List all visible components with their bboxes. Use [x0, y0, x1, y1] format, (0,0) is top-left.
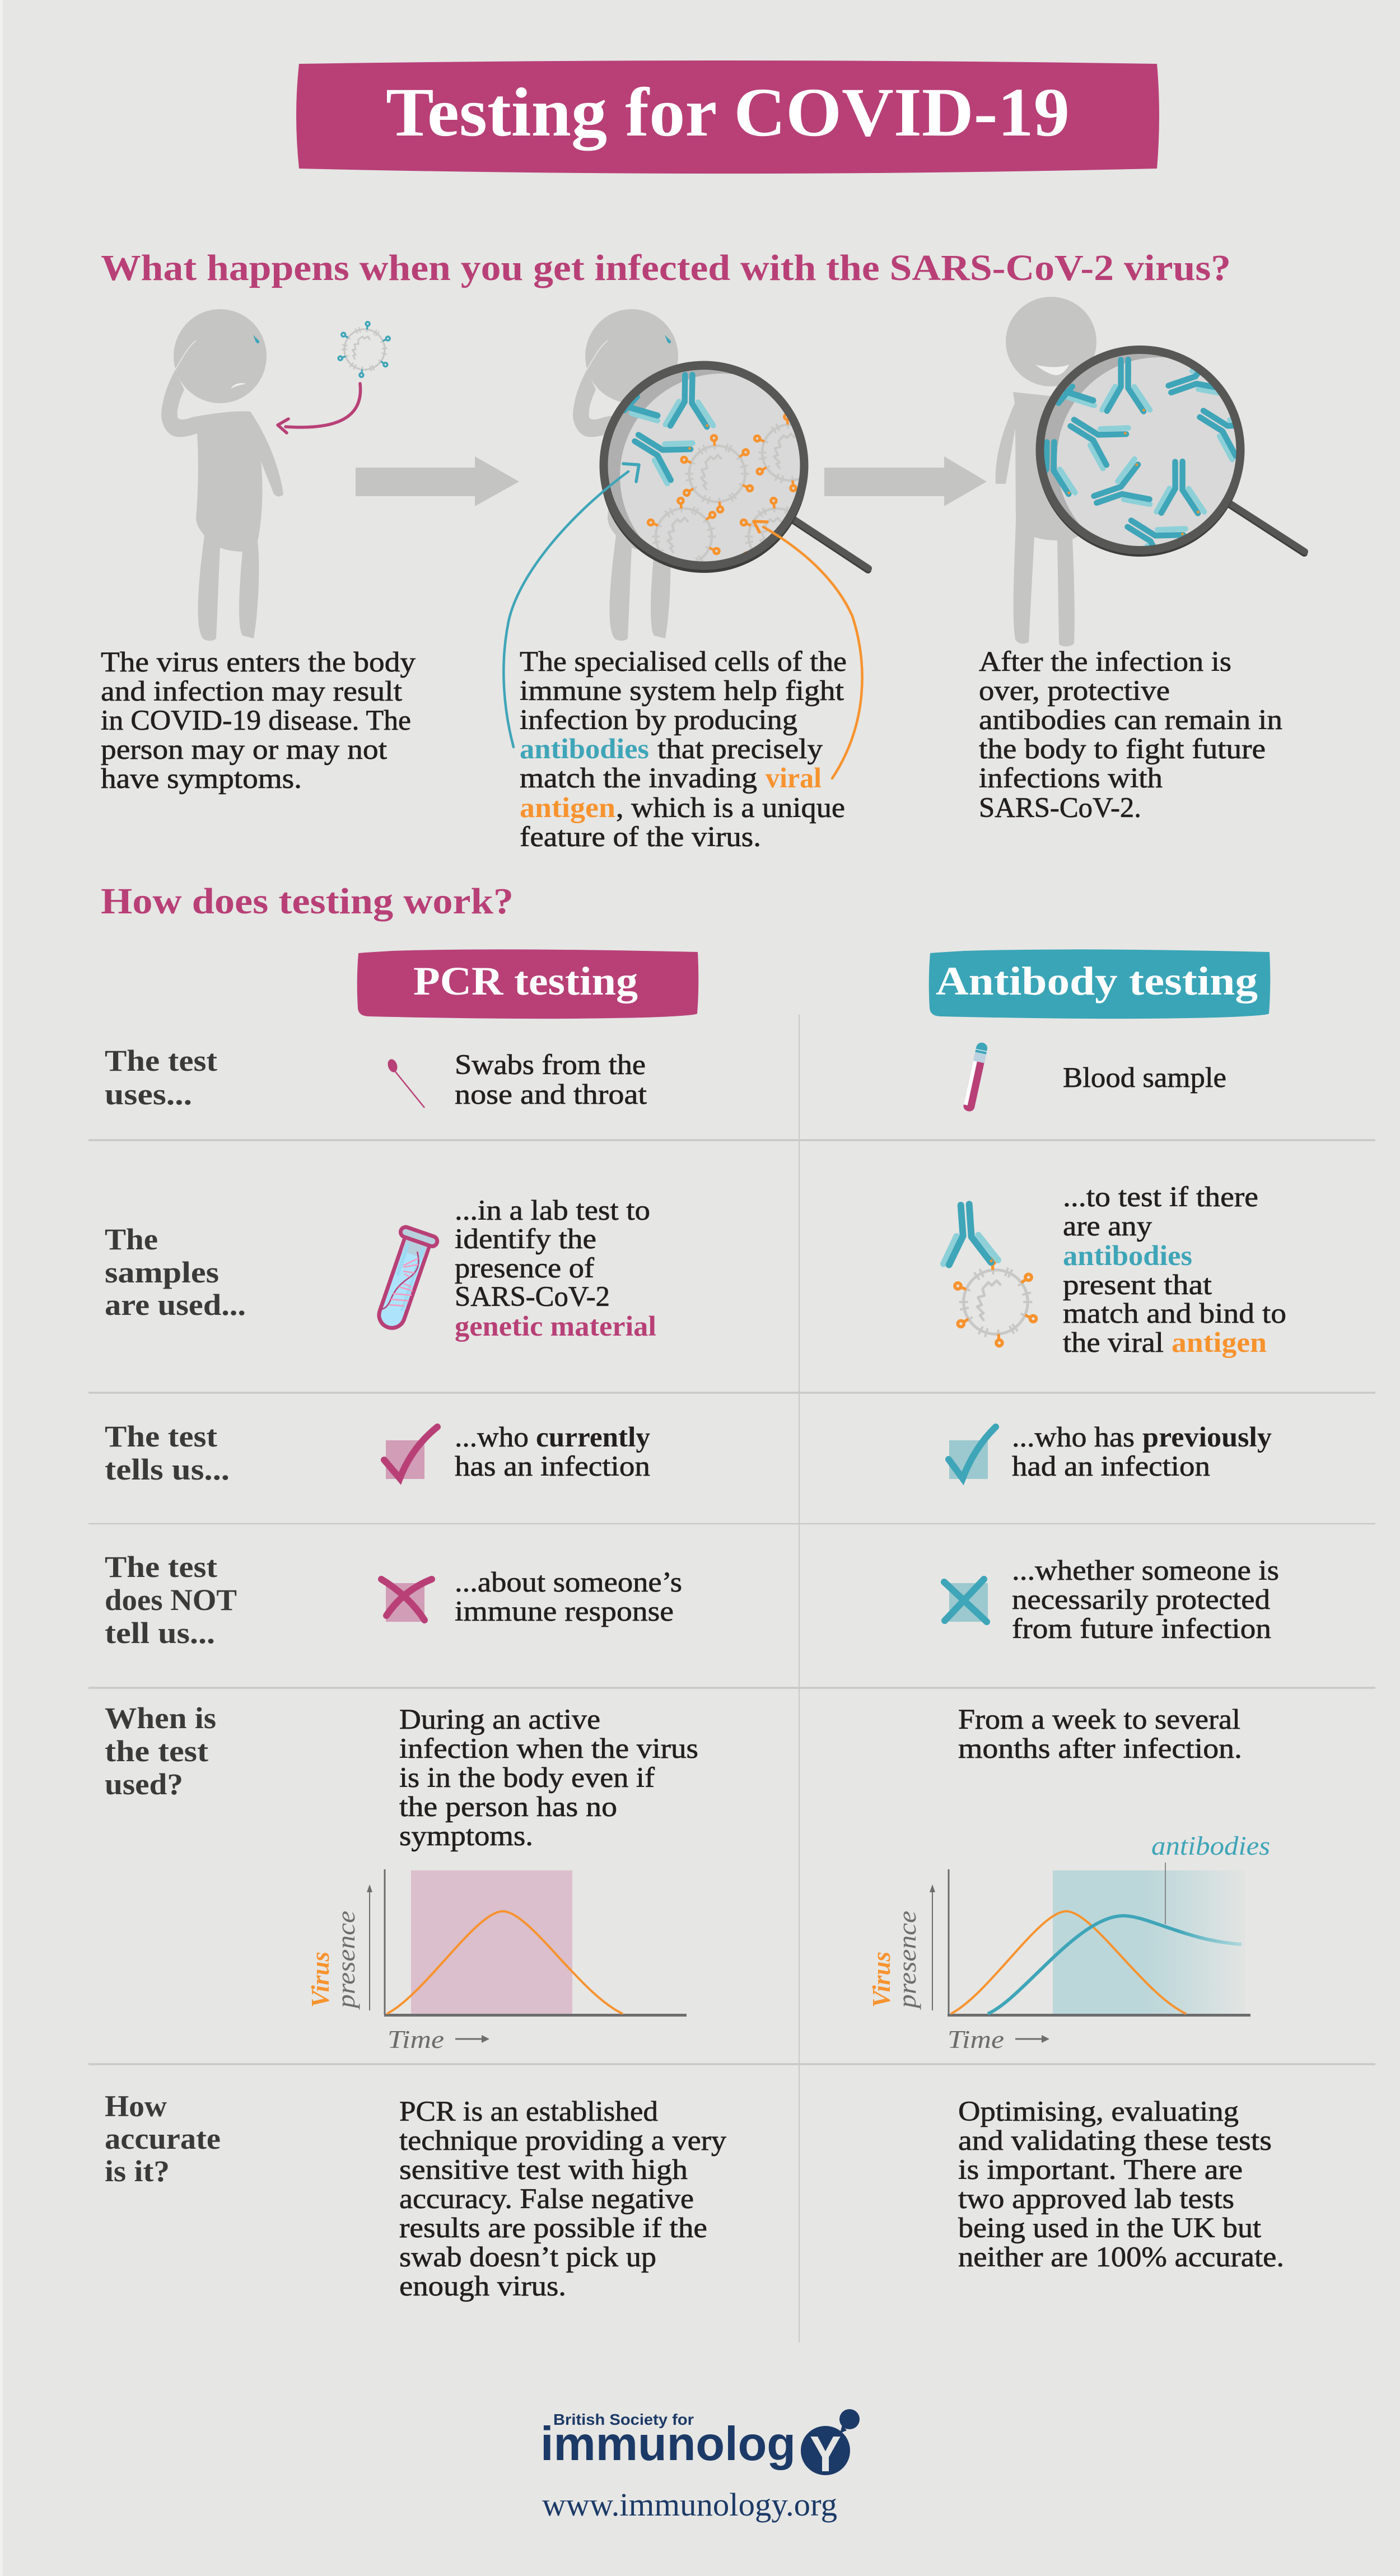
antibody description: antigen — [1172, 1327, 1267, 1359]
PCR accuracy text: accuracy. False negative — [399, 2183, 694, 2215]
row label: The test — [105, 1550, 217, 1584]
antibody accuracy text: two approved lab tests — [958, 2183, 1234, 2215]
row: the test does not tell us — [105, 1550, 1279, 1650]
antibody limitation text: necessarily protected — [1012, 1584, 1270, 1616]
icon: virus — [333, 317, 396, 382]
text block: step 2: infection by producing — [520, 704, 797, 736]
arrow: step 2 to 3 — [824, 456, 987, 506]
PCR description — [455, 1195, 656, 1342]
icon: pink tick — [384, 1427, 437, 1479]
icon: pink cross — [381, 1579, 432, 1622]
row label: tell us... — [105, 1616, 215, 1650]
PCR tells text: ...who — [455, 1422, 529, 1453]
text block: step 2: , which is a unique — [616, 792, 845, 824]
PCR description: ...in a lab test to — [455, 1195, 650, 1226]
PCR description: SARS-CoV-2 — [455, 1281, 610, 1313]
antibody sample text: Blood sample — [1063, 1062, 1226, 1094]
row label: uses... — [105, 1077, 192, 1111]
chart: antibody presence over time: antibodies — [1151, 1831, 1270, 1861]
antibody description: ...to test if there — [1063, 1182, 1258, 1213]
chart: PCR virus presence over time: Time — [388, 2025, 444, 2054]
antibody tells text: had an infection — [1012, 1451, 1210, 1482]
column header: Antibody testing — [929, 949, 1270, 1019]
antibody description: the viral — [1063, 1327, 1164, 1359]
PCR timing text — [399, 1704, 698, 1852]
PCR timing text: the person has no — [399, 1791, 617, 1823]
text block: step 1: have symptoms. — [101, 763, 302, 795]
antibody accuracy text: is important. There are — [958, 2154, 1243, 2186]
text block: step 2: viral — [766, 763, 822, 794]
text block: step 3: antibodies can remain in — [979, 704, 1282, 736]
PCR accuracy text — [399, 2096, 727, 2302]
PCR tells text: currently — [536, 1422, 650, 1453]
row: how accurate is it — [105, 2089, 1284, 2302]
text block: step 3: the body to fight future — [979, 734, 1266, 765]
antibody timing text: From a week to several — [958, 1704, 1240, 1735]
row label — [105, 1222, 246, 1322]
text block: step 2 — [520, 646, 847, 853]
PCR sample text: nose and throat — [455, 1079, 647, 1110]
PCR tells text: has an infection — [455, 1451, 650, 1482]
row label: samples — [105, 1256, 219, 1289]
title banner — [296, 60, 1159, 174]
person unwell — [161, 309, 283, 641]
text block: step 2: antigen — [520, 792, 615, 824]
PCR limitation text: immune response — [455, 1596, 674, 1627]
PCR tells text — [455, 1422, 650, 1482]
arrow: antibodies callout — [503, 464, 639, 747]
row label — [105, 1044, 217, 1111]
row label: The — [105, 1222, 158, 1256]
icon: teal tick — [949, 1427, 996, 1479]
PCR accuracy text: enough virus. — [399, 2271, 566, 2302]
row label: When is — [105, 1701, 216, 1735]
antibody tells text: previously — [1142, 1422, 1272, 1453]
panel: infection figure 3 — [996, 297, 1305, 646]
text block: step 2: feature of the virus. — [520, 822, 761, 853]
row label: are used... — [105, 1288, 246, 1322]
icon: teal cross — [944, 1579, 988, 1622]
text block: step 2: that precisely — [657, 734, 823, 765]
PCR sample text: Swabs from the — [455, 1049, 646, 1081]
chart: PCR virus presence over time: presence — [332, 1911, 360, 2010]
PCR accuracy text: PCR is an established — [399, 2096, 658, 2127]
row label: The test — [105, 1044, 217, 1077]
row label — [105, 1701, 216, 1801]
heading: what happens: What happens when you get infected with the SARS-CoV-2 virus? — [101, 248, 1231, 288]
text block: step 2: match the invading — [520, 763, 757, 794]
antibody limitation text: ...whether someone is — [1012, 1555, 1279, 1586]
text block: step 1 — [101, 647, 416, 795]
arrow: step 1 to 2 — [356, 456, 519, 506]
antibody timing text: months after infection. — [958, 1733, 1242, 1765]
antibody accuracy text: and validating these tests — [958, 2125, 1272, 2157]
antibody description: are any — [1063, 1211, 1152, 1242]
PCR timing text: infection when the virus — [399, 1733, 698, 1765]
antibody tells text — [1012, 1422, 1272, 1482]
text block: step 3: infections with — [979, 763, 1163, 794]
column header: PCR testing — [357, 949, 698, 1019]
column header: PCR testing: PCR testing — [413, 959, 638, 1004]
table dividers — [88, 1015, 1375, 2342]
row label: used? — [105, 1767, 183, 1801]
antibody limitation text — [1012, 1555, 1279, 1645]
PCR timing text: During an active — [399, 1704, 600, 1735]
row label — [105, 1550, 237, 1650]
icon: antibody binding virus — [944, 1204, 1037, 1346]
PCR limitation text — [455, 1567, 682, 1627]
icon: swab — [386, 1058, 424, 1108]
text block: step 2: immune system help fight — [520, 675, 844, 707]
row label: is it? — [105, 2154, 170, 2188]
row label — [105, 2089, 221, 2188]
row label: tells us... — [105, 1453, 230, 1486]
arrow: virus enters body — [278, 384, 361, 433]
antibody description: antibodies — [1063, 1240, 1192, 1272]
text block: step 1: and infection may result — [101, 676, 402, 707]
PCR accuracy text: swab doesn’t pick up — [399, 2242, 656, 2273]
column header: Antibody testing: Antibody testing — [936, 959, 1258, 1004]
website address: www.immunology.org — [542, 2486, 837, 2523]
row label: The test — [105, 1420, 217, 1453]
row label: How — [105, 2089, 167, 2123]
icon: blood tube — [963, 1042, 988, 1112]
antibody description: present that — [1063, 1270, 1212, 1301]
logo: British Society for Immunology — [540, 2409, 860, 2482]
person with magnified cells — [573, 309, 695, 641]
magnifying glass with antibodies and virus — [600, 365, 869, 578]
chart: antibody presence over time: presence — [893, 1911, 921, 2010]
PCR accuracy text: sensitive test with high — [399, 2154, 688, 2186]
row: the samples are used — [105, 1182, 1286, 1359]
PCR description: presence of — [455, 1253, 594, 1284]
magnifying glass with antibodies — [1027, 348, 1305, 570]
row label: does NOT — [105, 1583, 237, 1617]
PCR sample text — [455, 1049, 647, 1110]
antibody description — [1063, 1182, 1286, 1359]
PCR timing text: symptoms. — [399, 1821, 533, 1852]
text block: step 3 — [979, 646, 1282, 824]
antibody accuracy text: being used in the UK but — [958, 2213, 1261, 2244]
chart: PCR virus presence over time: Virus — [306, 1952, 334, 2008]
PCR description: genetic material — [455, 1311, 656, 1342]
row: the test tells us — [105, 1420, 1272, 1486]
text block: step 1: The virus enters the body — [101, 647, 416, 678]
antibody accuracy text — [958, 2096, 1284, 2273]
PCR description: identify the — [455, 1224, 596, 1255]
antibody accuracy text: Optimising, evaluating — [958, 2096, 1239, 2127]
logo: British Society for Immunology: immunolog — [540, 2418, 796, 2471]
row label — [105, 1420, 230, 1486]
heading: how does testing work: How does testing work? — [101, 881, 514, 922]
row: the test uses — [105, 1042, 1226, 1112]
text block: step 2: antibodies — [520, 734, 649, 765]
text block: step 1: person may or may not — [101, 734, 387, 766]
antibody limitation text: from future infection — [1012, 1613, 1271, 1645]
chart: antibody presence over time — [867, 1831, 1270, 2054]
PCR timing text: is in the body even if — [399, 1762, 655, 1794]
row label: accurate — [105, 2122, 221, 2155]
antibody description: match and bind to — [1063, 1298, 1286, 1329]
row: when is the test used — [105, 1701, 1270, 2054]
row label: the test — [105, 1734, 208, 1768]
text block: step 3: over, protective — [979, 675, 1170, 707]
text block: step 3: SARS-CoV-2. — [979, 792, 1141, 824]
text block: step 3: After the infection is — [979, 646, 1231, 678]
antibody accuracy text: neither are 100% accurate. — [958, 2242, 1284, 2273]
PCR limitation text: ...about someone’s — [455, 1567, 682, 1598]
text block: step 1: in COVID-19 disease. The — [101, 705, 411, 736]
arrow: antigen callout — [754, 521, 862, 778]
PCR accuracy text: technique providing a very — [399, 2125, 727, 2157]
chart: PCR virus presence over time — [306, 1869, 687, 2054]
chart: antibody presence over time: Time — [948, 2025, 1004, 2054]
chart: antibody presence over time: Virus — [867, 1952, 895, 2008]
antibody timing text — [958, 1704, 1242, 1765]
icon: test tube with DNA — [370, 1226, 438, 1333]
panel: infection figure 2 — [503, 309, 869, 778]
panel: infection figure 1 — [161, 309, 396, 641]
text block: step 2: The specialised cells of the — [520, 646, 847, 678]
logo: British Society for Immunology: Y — [810, 2426, 841, 2482]
antibody tells text: ...who has — [1012, 1422, 1135, 1453]
person happy — [996, 297, 1096, 646]
title text: Testing for COVID-19 — [386, 74, 1070, 151]
logo: British Society for Immunology: British Society for — [553, 2411, 694, 2428]
PCR accuracy text: results are possible if the — [399, 2213, 707, 2244]
